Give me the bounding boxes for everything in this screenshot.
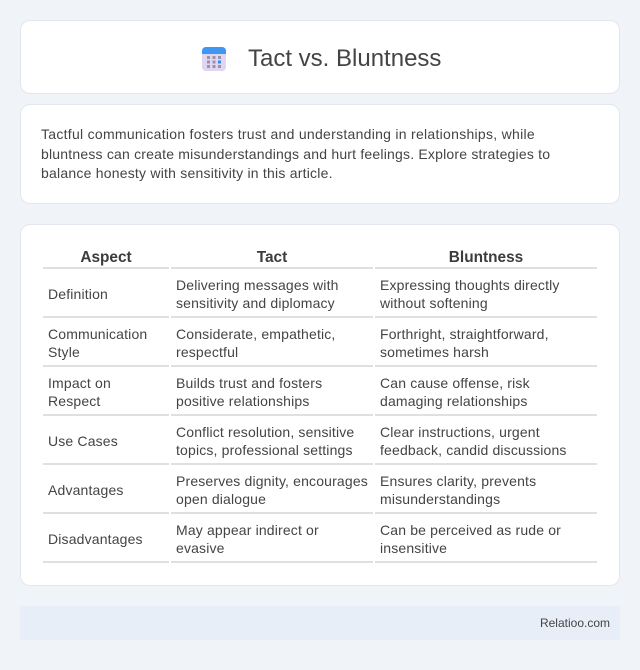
row: Definition — [48, 277, 560, 311]
panel: comparison table: Can be perceived as rude or — [380, 522, 561, 538]
panel: comparison table: sometimes harsh — [380, 344, 489, 360]
panel: comparison table: sensitivity and diplomacy — [176, 295, 335, 311]
panel: comparison table: Disadvantages — [48, 531, 143, 547]
panel: comparison table: without softening — [380, 295, 488, 311]
panel: comparison table: Delivering messages with — [176, 277, 339, 293]
panel: comparison table: May appear indirect or — [176, 522, 319, 538]
footer: Relatioo.com — [540, 616, 610, 630]
panel: comparison table: misunderstandings — [380, 491, 500, 507]
intro text: balance honesty with sensitivity in this article. — [41, 165, 333, 181]
panel: comparison table: damaging relationships — [380, 393, 528, 409]
table header: Bluntness: Bluntness — [449, 249, 523, 266]
panel: comparison table: Builds trust and fosters — [176, 375, 322, 391]
panel: comparison table: insensitive — [380, 540, 447, 556]
panel: comparison table: feedback, candid discussions — [380, 442, 567, 458]
panel: comparison table: Style — [48, 344, 80, 360]
table header: Aspect: Aspect — [80, 249, 132, 266]
panel: comparison table: positive relationships — [176, 393, 309, 409]
panel: comparison table: topics, professional settings — [176, 442, 353, 458]
panel: comparison table: Considerate, empathetic, — [176, 326, 335, 342]
row: Impact on Respect — [48, 375, 530, 409]
panel: comparison table: Communication — [48, 326, 147, 342]
panel: comparison table: Ensures clarity, prevents — [380, 473, 536, 489]
row: Disadvantages — [48, 522, 561, 556]
footer — [20, 606, 620, 640]
panel: comparison table: Conflict resolution, sensitive — [176, 424, 354, 440]
panel: comparison table: Use Cases — [48, 433, 118, 449]
panel: comparison table: Impact on — [48, 375, 111, 391]
panel: comparison table: Can cause offense, risk — [380, 375, 530, 391]
panel: comparison table: open dialogue — [176, 491, 266, 507]
panel: comparison table: Advantages — [48, 482, 124, 498]
panel: introduction — [20, 104, 620, 204]
intro text: Tactful communication fosters trust and understanding in relationships, while — [41, 126, 535, 142]
panel: comparison table: Forthright, straightforward, — [380, 326, 549, 342]
panel: comparison table: Respect — [48, 393, 100, 409]
title: Tact vs. Bluntness — [248, 45, 441, 72]
panel: comparison table: respectful — [176, 344, 238, 360]
icon: calendar — [202, 47, 226, 71]
intro text — [41, 126, 550, 181]
panel: comparison table: Preserves dignity, encourages — [176, 473, 368, 489]
panel: comparison table: Expressing thoughts directly — [380, 277, 560, 293]
row: Communication Style — [48, 326, 549, 360]
panel: comparison table: Definition — [48, 286, 108, 302]
row: Advantages — [48, 473, 536, 507]
header card — [20, 20, 620, 94]
intro text: bluntness can create misunderstandings and hurt feelings. Explore strategies to — [41, 146, 550, 162]
row: Use Cases — [48, 424, 567, 458]
table header: Tact: Tact — [257, 249, 287, 266]
panel: comparison table: evasive — [176, 540, 225, 556]
panel: comparison table: Clear instructions, urgent — [380, 424, 540, 440]
